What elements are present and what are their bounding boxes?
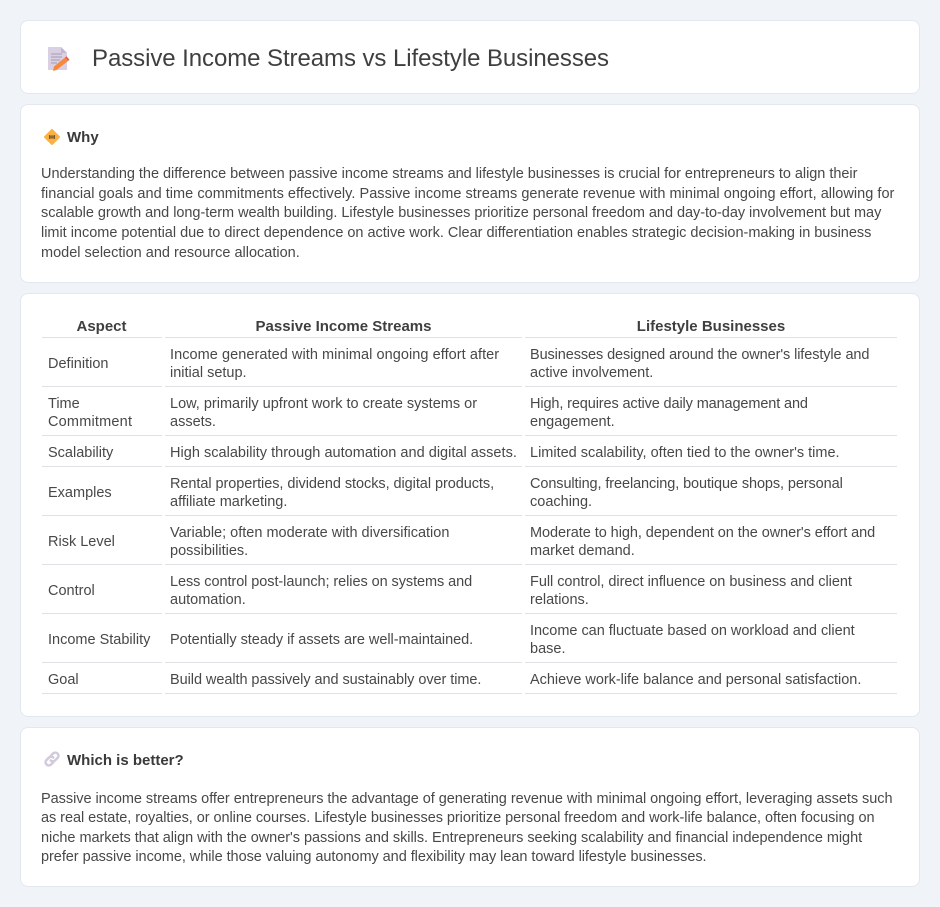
icon: memo document with pencil — [48, 47, 70, 71]
row: income stability — [48, 623, 855, 657]
text block: which is better: as real estate, royalties, or online courses. Lifestyle businesses prioritize personal freedom and work-life balance, often focusing on — [41, 810, 874, 826]
row: examples — [48, 476, 843, 510]
row: time commitment: Commitment — [48, 414, 132, 430]
text block: why — [41, 166, 894, 261]
row: definition: Definition — [48, 356, 108, 372]
comparison table — [42, 318, 897, 694]
heading: which is better: Which is better? — [67, 752, 184, 769]
row: control: automation. — [170, 592, 246, 608]
row: examples: Consulting, freelancing, boutique shops, personal — [530, 476, 843, 492]
row: definition: initial setup. — [170, 365, 247, 381]
row: time commitment — [48, 396, 808, 430]
panel: why — [20, 104, 920, 283]
row: risk level: possibilities. — [170, 543, 248, 559]
text block: why: model selection and resource allocation. — [41, 245, 300, 261]
row: income stability: Income can fluctuate based on workload and client — [530, 623, 855, 639]
row: examples: coaching. — [530, 494, 592, 510]
row: control: Control — [48, 583, 95, 599]
text block: why: financial goals and time commitments effectively. Passive income streams generate revenue with minimal ongoing effort, allowing for — [41, 186, 894, 202]
row: risk level: Risk Level — [48, 534, 115, 550]
text block: why: scalable growth and long-term wealth building. Lifestyle businesses prioritize personal freedom and day-to-day involvement but may — [41, 205, 881, 221]
row: definition: active involvement. — [530, 365, 653, 381]
text block: which is better: prefer passive income, while those valuing autonomy and flexibility may lean toward lifestyle businesses. — [41, 849, 707, 865]
row: examples: Rental properties, dividend stocks, digital products, — [170, 476, 494, 492]
heading: why: Why — [67, 129, 99, 146]
row: risk level — [48, 525, 875, 559]
row: scalability: Limited scalability, often tied to the owner's time. — [530, 445, 840, 461]
row: income stability: base. — [530, 641, 565, 657]
row: control: Less control post-launch; relies on systems and — [170, 574, 472, 590]
row: definition: Businesses designed around the owner's lifestyle and — [530, 347, 869, 363]
title: Passive Income Streams vs Lifestyle Businesses — [92, 45, 609, 72]
table header row: Aspect — [76, 318, 127, 335]
row: goal: Achieve work-life balance and personal satisfaction. — [530, 672, 861, 688]
row: time commitment: High, requires active daily management and — [530, 396, 808, 412]
table header row: Lifestyle Businesses — [637, 318, 785, 335]
row: risk level: market demand. — [530, 543, 635, 559]
panel: which is better — [20, 727, 920, 887]
row: goal: Build wealth passively and sustainably over time. — [170, 672, 481, 688]
row: examples: Examples — [48, 485, 112, 501]
row: time commitment: engagement. — [530, 414, 615, 430]
text block: why: Understanding the difference between passive income streams and lifestyle businesses is crucial for entrepreneurs to align their — [41, 166, 857, 182]
row: control — [48, 574, 852, 608]
table header row: Passive Income Streams — [256, 318, 431, 335]
icon: warning diamond — [44, 129, 60, 145]
text block: which is better — [41, 791, 892, 865]
panel: comparison table — [20, 293, 920, 717]
row: time commitment: Time — [48, 396, 80, 412]
table header row — [76, 318, 785, 335]
row: risk level: Moderate to high, dependent on the owner's effort and — [530, 525, 875, 541]
row: time commitment: Low, primarily upfront work to create systems or — [170, 396, 477, 412]
row: definition: Income generated with minimal ongoing effort after — [170, 347, 499, 363]
text block: why: limit income potential due to direct dependence on active work. Clear differentiation enables strategic decision-making in business — [41, 225, 871, 241]
row: definition — [48, 347, 869, 381]
row: income stability: Potentially steady if assets are well-maintained. — [170, 632, 473, 648]
row: scalability: Scalability — [48, 445, 113, 461]
row: examples: affiliate marketing. — [170, 494, 287, 510]
row: income stability: Income Stability — [48, 632, 150, 648]
row: time commitment: assets. — [170, 414, 216, 430]
text block: which is better: niche markets that align with the owner's passions and skills. Entrepreneurs seeking scalability and financial independence might — [41, 830, 862, 846]
panel: header — [20, 20, 920, 94]
row: control: relations. — [530, 592, 589, 608]
row: goal: Goal — [48, 672, 79, 688]
row: scalability: High scalability through automation and digital assets. — [170, 445, 517, 461]
icon: link — [44, 751, 60, 767]
row: risk level: Variable; often moderate with diversification — [170, 525, 449, 541]
text block: which is better: Passive income streams offer entrepreneurs the advantage of generating revenue with minimal ongoing effort, leveraging assets such — [41, 791, 892, 807]
row: goal — [48, 672, 861, 688]
row: scalability — [48, 445, 840, 461]
row: control: Full control, direct influence on business and client — [530, 574, 852, 590]
